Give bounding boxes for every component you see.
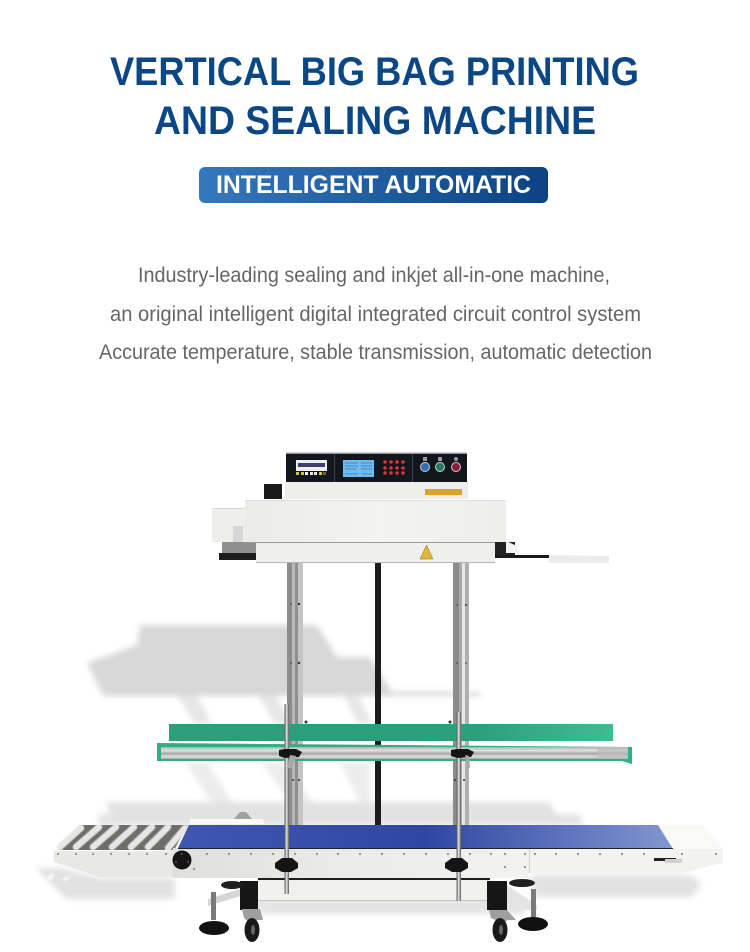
description text: Industry-leading sealing and inkjet all-in-one machine, (138, 264, 610, 287)
left adjusting rod and clamps (275, 704, 302, 894)
conveyor infeed sensor (234, 812, 252, 819)
shadow light gaps (46, 873, 70, 881)
centre black post (375, 563, 381, 825)
left aluminium column (287, 563, 303, 825)
right adjusting rod and clamps (445, 712, 474, 901)
title: AND SEALING MACHINE (154, 99, 596, 143)
roller drive knob (172, 850, 192, 870)
print display (296, 460, 327, 471)
description text (99, 264, 652, 364)
machine (54, 452, 723, 942)
right aluminium column (453, 563, 469, 825)
roller table side plate and rollers (54, 825, 188, 877)
title: VERTICAL BIG BAG PRINTING (110, 50, 639, 94)
left leg and caster (199, 881, 263, 942)
blue lcd (343, 460, 374, 477)
sealing head body (212, 482, 609, 563)
rear green guide (169, 724, 613, 741)
machine floor and wall shadow (36, 625, 702, 914)
right leg and caster (487, 879, 548, 942)
control panel (286, 452, 467, 482)
output tray (495, 555, 609, 563)
title (110, 50, 639, 143)
warning triangle sticker (420, 545, 433, 559)
blue button (420, 462, 430, 472)
red button (452, 462, 460, 472)
lower frame (258, 878, 490, 901)
badge: intelligent automatic: INTELLIGENT AUTOMATIC (216, 171, 531, 199)
description text: Accurate temperature, stable transmission, automatic detection (99, 341, 652, 364)
belt end white cover (658, 825, 723, 849)
column bolts (290, 603, 467, 781)
front green guide with aluminium rail (157, 743, 632, 764)
button icons (423, 457, 458, 461)
conveyor infeed white guide (190, 819, 264, 824)
description text: an original intelligent digital integrated circuit control system (110, 303, 641, 326)
conveyor side plate (57, 848, 723, 878)
conveyor belt (178, 825, 673, 848)
green button (436, 462, 444, 472)
red keypad (383, 460, 405, 475)
